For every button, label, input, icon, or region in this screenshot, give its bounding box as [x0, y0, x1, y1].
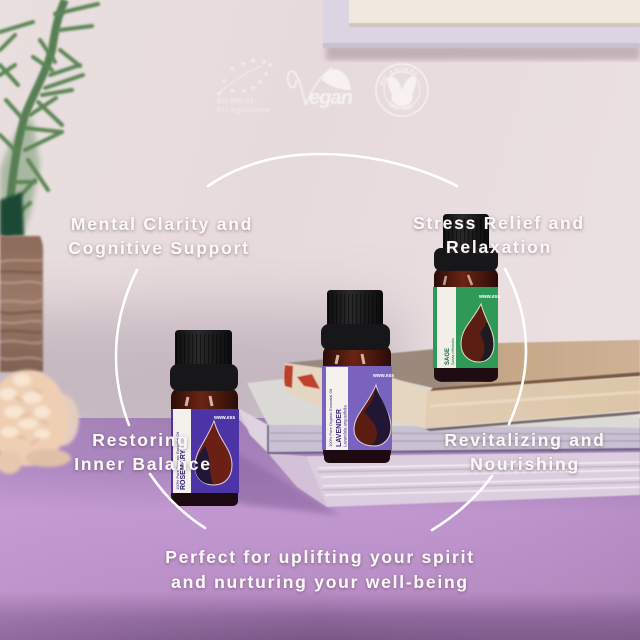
- logo: EU organic: ★: [240, 60, 246, 68]
- logo: EU organic: [216, 57, 273, 114]
- logo: EU organic: ★: [216, 90, 222, 98]
- middle book: [247, 375, 640, 453]
- rosemary label: www.ess: [213, 415, 235, 421]
- logo: EU organic: ★: [241, 87, 247, 95]
- logo: EU organic: BG-BIO-21: [217, 96, 254, 105]
- label: mental clarity: [68, 214, 253, 258]
- logo: no animal testing: TESTING: [388, 104, 412, 110]
- lavender label: Lavandula angustifolia: [342, 405, 348, 447]
- lavender label: 100% Pure Organic Essential Oil: [328, 389, 333, 447]
- logo: EU organic: ★: [257, 78, 263, 86]
- basket planter: [0, 236, 43, 372]
- closing statement: and nurturing your well-being: [171, 572, 469, 592]
- label: inner balance: Restoring: [92, 430, 190, 450]
- label: revitalizing: [444, 430, 606, 474]
- label: revitalizing: Nourishing: [470, 454, 580, 474]
- certification logos: [216, 57, 429, 117]
- sage label: SAGE: [445, 348, 451, 365]
- label: stress relief: Stress Relief and: [413, 213, 585, 233]
- logo: no animal testing: NO ANIMAL: [380, 67, 417, 86]
- logo: Vegan: egan: [309, 87, 353, 109]
- table surface: [0, 418, 640, 640]
- bottle: lavender: [321, 290, 394, 463]
- lavender label: [322, 366, 394, 450]
- bottle: sage: [433, 214, 500, 382]
- logo: EU organic: ★: [229, 87, 235, 95]
- logo: EU organic: ★: [263, 70, 269, 78]
- label: inner balance: [74, 430, 212, 474]
- picture frame: [323, 0, 640, 60]
- logo: EU organic: ★: [261, 58, 267, 66]
- label: mental clarity: Cognitive Support: [68, 238, 250, 258]
- label: revitalizing: Revitalizing and: [444, 430, 606, 450]
- label: inner balance: Inner Balance: [74, 454, 212, 474]
- lavender label: www.ess: [372, 373, 394, 379]
- books: [238, 340, 640, 507]
- plant: [0, 0, 98, 236]
- upper tan book: [283, 340, 640, 431]
- bottle: rosemary: [170, 330, 239, 506]
- sage label: [433, 287, 500, 368]
- label: stress relief: Relaxation: [446, 237, 552, 257]
- table shadow: [190, 453, 340, 515]
- logo: EU organic: ★: [229, 65, 235, 73]
- logo: EU organic: ★: [250, 84, 256, 92]
- sage label: www.ess: [478, 294, 500, 300]
- rosemary label: 100% Pure Organic Essential Oil: [175, 432, 180, 490]
- background wall: [0, 0, 640, 460]
- logo: EU organic: ★: [250, 57, 256, 65]
- closing statement: [165, 547, 475, 592]
- lavender label: LAVENDER: [336, 409, 343, 447]
- rosemary label: ROSEMARY: [180, 449, 187, 490]
- label: stress relief: [413, 213, 585, 257]
- logo: EU organic: ★: [267, 61, 273, 69]
- logo: Vegan: [288, 68, 353, 109]
- benefit ring: [116, 154, 526, 530]
- sage label: Salvia officinalis: [451, 338, 455, 365]
- desert rose stone: [0, 370, 79, 474]
- logo: EU organic: ★: [221, 77, 227, 85]
- logo: no animal testing: [375, 63, 429, 117]
- rosemary label: [171, 409, 239, 493]
- lower pale book: [238, 408, 640, 507]
- closing statement: Perfect for uplifting your spirit: [165, 547, 475, 567]
- label: mental clarity: Mental Clarity and: [71, 214, 253, 234]
- logo: EU organic: EU Agriculture: [217, 105, 270, 114]
